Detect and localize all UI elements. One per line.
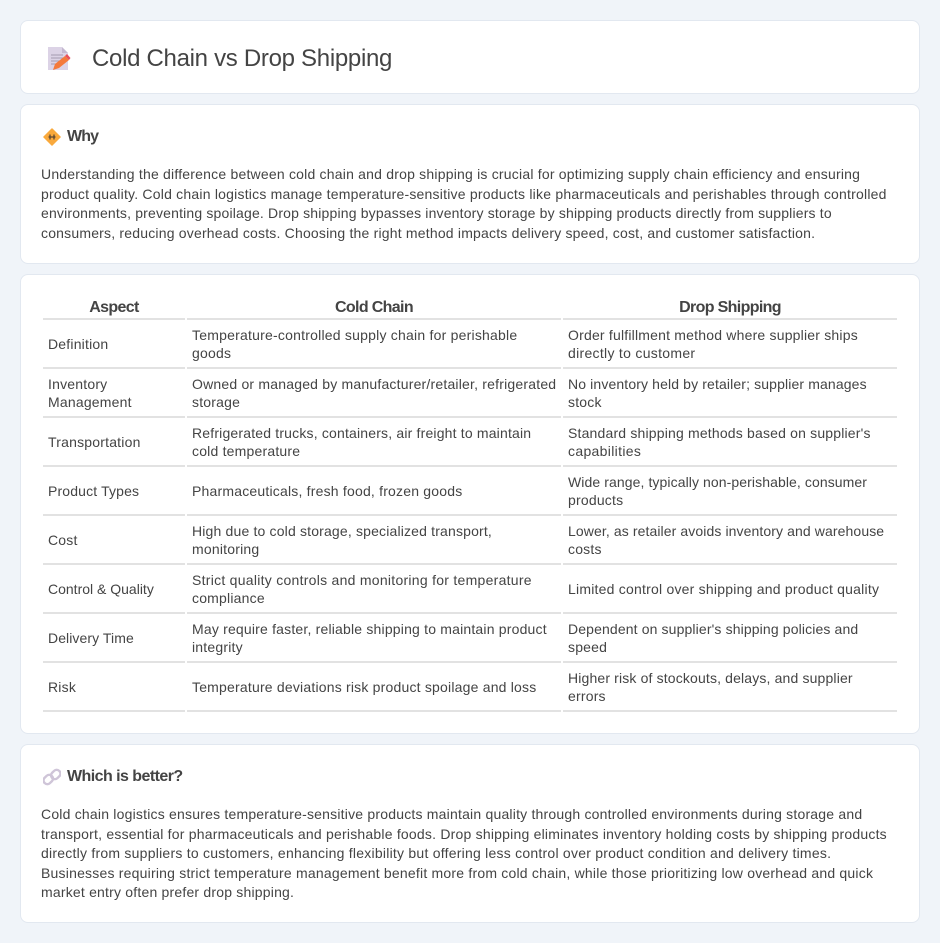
row: Definition: Definition [48,336,108,352]
row: Product Types: Wide range, typically non-perishable, consumer [568,474,867,490]
row: Transportation: cold temperature [192,443,300,459]
table header row: Aspect [89,299,139,316]
row: Risk [48,670,853,704]
panel: comparison table [20,274,920,734]
row: Definition: Temperature-controlled supply chain for perishable [192,327,517,343]
text: which is better paragraph: Businesses requiring strict temperature management benefit more from cold chain, while those prioritizing low overhead and quick [41,864,873,880]
row: Delivery Time [48,621,858,655]
panel: why [20,104,920,264]
row: Cost: costs [568,541,602,557]
row: Inventory Management: Owned or managed by manufacturer/retailer, refrigerated [192,376,556,392]
row: Cost: Cost [48,532,78,548]
text: which is better paragraph: transport, essential for pharmaceuticals and perishable foods. Drop shipping eliminates inventory holding costs by shipping products [41,826,887,842]
row: Transportation [48,425,871,459]
row: Control & Quality: Strict quality controls and monitoring for temperature [192,572,532,588]
row: Cost [48,523,884,557]
row: Product Types: Pharmaceuticals, fresh food, frozen goods [192,483,462,499]
row: Definition: directly to customer [568,345,695,361]
row: Definition [48,327,858,361]
heading: why: Why [67,128,98,145]
row: Risk: Risk [48,679,76,695]
row: Cost: High due to cold storage, specialized transport, [192,523,492,539]
table header row: Drop Shipping [679,299,781,316]
row: Control & Quality: compliance [192,590,265,606]
row: Inventory Management: Inventory [48,376,107,392]
row: Cost: monitoring [192,541,259,557]
row: Control & Quality [48,572,879,606]
table header row [89,299,781,316]
text: why paragraph: consumers, reducing overhead costs. Choosing the right method impacts delivery speed, cost, and customer satisfaction. [41,224,815,240]
panel: which is better [20,744,920,923]
icon: chain link [43,768,61,786]
row: Cost: Lower, as retailer avoids inventory and warehouse [568,523,884,539]
text: why paragraph [41,166,887,241]
text: which is better paragraph: market entry often prefer drop shipping. [41,884,294,900]
row: Delivery Time: Delivery Time [48,630,134,646]
row: Inventory Management: stock [568,394,602,410]
icon: warning diamond [43,128,61,146]
row: Delivery Time: speed [568,639,607,655]
text: why paragraph: Understanding the difference between cold chain and drop shipping is crucial for optimizing supply chain efficiency and ensuring [41,166,860,182]
row: Inventory Management [48,376,867,410]
row: Inventory Management: No inventory held by retailer; supplier manages [568,376,867,392]
row: Product Types: products [568,492,623,508]
row: Product Types: Product Types [48,483,139,499]
icon: memo with pencil [48,47,70,70]
row: Risk: errors [568,688,606,704]
row: Inventory Management: storage [192,394,240,410]
row: Control & Quality: Limited control over shipping and product quality [568,581,879,597]
panel: title header [20,20,920,94]
heading: which is better: Which is better? [67,768,183,785]
row: Transportation: Refrigerated trucks, containers, air freight to maintain [192,425,531,441]
text: which is better paragraph: directly from suppliers to customers, enhancing flexibility but offering less control over product condition and delivery times. [41,845,831,861]
table header row: Cold Chain [335,299,413,316]
row: Definition: goods [192,345,231,361]
text: which is better paragraph: Cold chain logistics ensures temperature-sensitive products maintain quality through controlled environments during storage and [41,806,862,822]
text: why paragraph: product quality. Cold chain logistics manage temperature-sensitive products like pharmaceuticals and perishables through controlled [41,186,887,202]
row: Delivery Time: May require faster, reliable shipping to maintain product [192,621,547,637]
row: Risk: Temperature deviations risk product spoilage and loss [192,679,536,695]
row: Product Types [48,474,867,508]
row: Delivery Time: Dependent on supplier's shipping policies and [568,621,858,637]
row: Inventory Management: Management [48,394,132,410]
row: Delivery Time: integrity [192,639,243,655]
row: Definition: Order fulfillment method where supplier ships [568,327,858,343]
text: why paragraph: environments, preventing spoilage. Drop shipping bypasses inventory storage by shipping products directly from suppliers to [41,205,832,221]
row: Risk: Higher risk of stockouts, delays, and supplier [568,670,853,686]
comparison table [43,299,897,712]
row: Transportation: capabilities [568,443,641,459]
row: Control & Quality: Control & Quality [48,581,154,597]
text: which is better paragraph [41,806,887,900]
row: Transportation: Transportation [48,434,141,450]
row: Transportation: Standard shipping methods based on supplier's [568,425,871,441]
title: Cold Chain vs Drop Shipping [92,45,392,72]
